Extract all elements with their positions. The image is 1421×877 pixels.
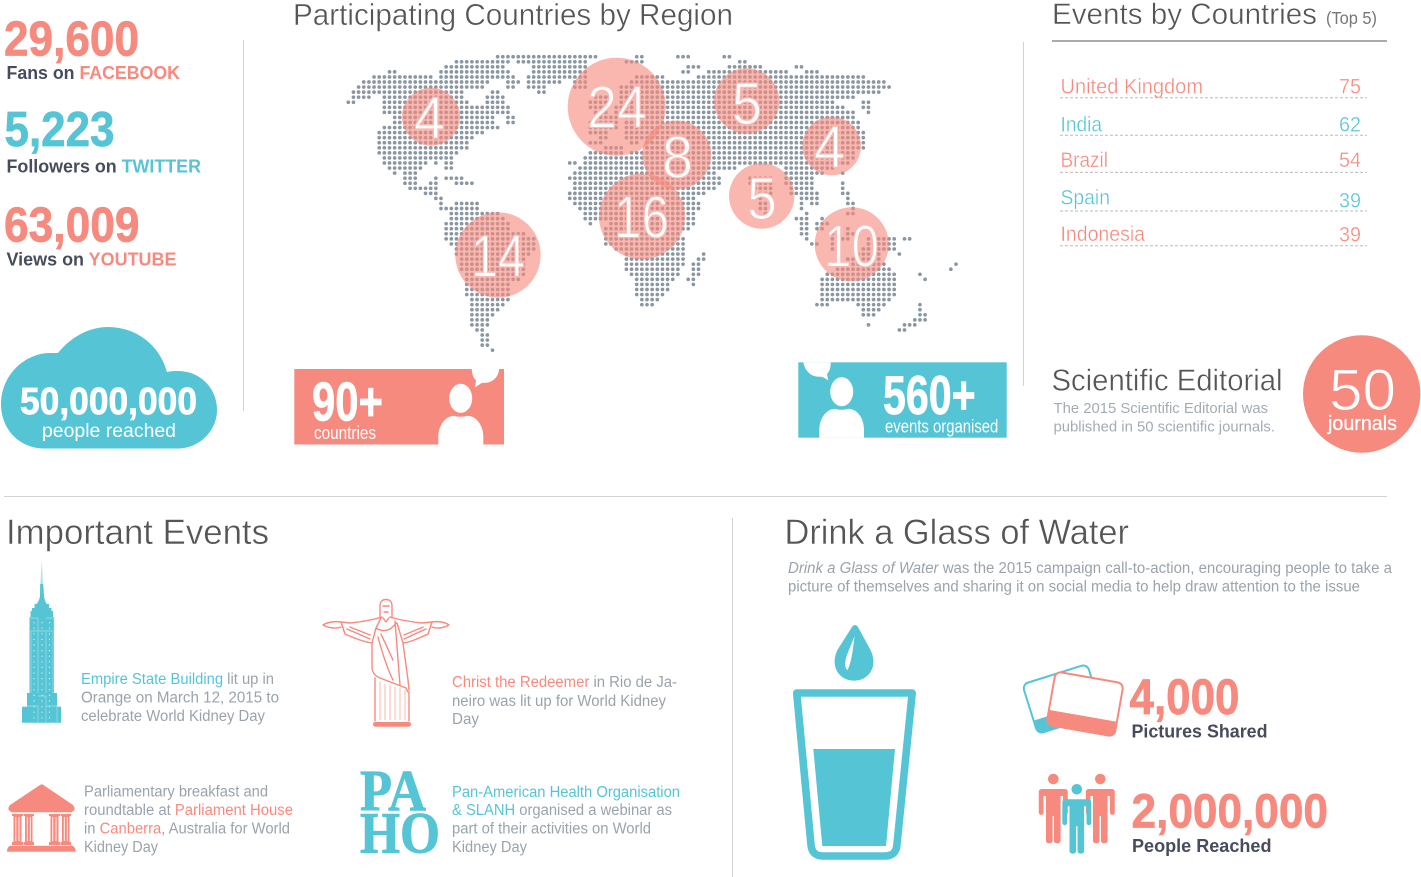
- heading: scientific editorial: Scientific Editorial: [1052, 363, 1282, 398]
- bubble: North America 4: [402, 86, 460, 152]
- icon: shared pictures: [1022, 664, 1124, 737]
- text: Empire State Building: Orange on March 12, 2015 to: [81, 689, 279, 706]
- stat: Twitter followers: 5,223: [4, 103, 114, 157]
- callout: 560+ events organised: events organised: [885, 417, 998, 437]
- row: United Kingdom: [1060, 75, 1367, 98]
- bubble: Africa 16: [599, 174, 685, 260]
- text: campaign description: Drink a Glass of Water was the 2015 campaign call-to-action, encouraging people to take a: [788, 560, 1392, 577]
- stat: YouTube views: Views on YOUTUBE: [6, 250, 176, 270]
- map bubbles: events per region: [402, 58, 889, 298]
- stat: Facebook fans: 29,600: [4, 12, 139, 66]
- text: Parliament House: Kidney Day: [84, 839, 158, 856]
- icon: water drop: [835, 625, 873, 681]
- text: Empire State Building: celebrate World Kidney Day: [81, 708, 265, 725]
- stat: YouTube views: [4, 199, 176, 270]
- icon: Empire State Building: [22, 560, 61, 723]
- callout: 560+ events organised: 560+: [883, 364, 976, 426]
- row: Brazil: [1060, 149, 1367, 172]
- icon: PAHO logo: HO: [360, 801, 440, 866]
- heading: important events: Important Events: [6, 513, 269, 552]
- text: Pan-American Health Organisation: Kidney Day: [452, 839, 527, 856]
- callout: 90+ countries: [294, 369, 504, 444]
- bubble: South America 14: [455, 212, 541, 298]
- heading: drink a glass of water: Drink a Glass of Water: [784, 513, 1129, 552]
- text: Parliament House: roundtable at Parliament House: [84, 802, 293, 819]
- row: Brazil: Brazil: [1060, 149, 1108, 172]
- icon: Christ the Redeemer: [323, 600, 449, 727]
- stat: pictures shared: Pictures Shared: [1132, 722, 1268, 742]
- bubble: East Asia 4: 4: [814, 114, 845, 180]
- text: Christ the Redeemer: [452, 674, 677, 728]
- text: editorial description: The 2015 Scientific Editorial was: [1054, 400, 1268, 417]
- badge: 50 journals: journals: [1327, 413, 1397, 435]
- stat: Facebook fans: Fans on FACEBOOK: [6, 63, 180, 83]
- stat: YouTube views: 63,009: [4, 199, 140, 253]
- badge: 50 journals: 50: [1329, 358, 1396, 423]
- sub-heading: top 5: (Top 5): [1326, 8, 1377, 28]
- row: Brazil: 54: [1339, 149, 1361, 172]
- dot world map: [348, 57, 956, 350]
- bubble: South Asia 5: [729, 163, 794, 232]
- row: India: 62: [1339, 114, 1361, 137]
- bubble: Russia 5: [714, 68, 779, 137]
- icon: PAHO logo: [360, 758, 440, 866]
- stat: Twitter followers: Followers on TWITTER: [6, 157, 201, 177]
- bubble: South America 14: 14: [471, 224, 525, 290]
- stat: people reached: People Reached: [1132, 836, 1272, 856]
- stat: pictures shared: 4,000: [1130, 669, 1240, 725]
- panel: events by countries: [1052, 0, 1387, 247]
- text: campaign description: [788, 560, 1392, 596]
- bubble: Middle East 8: 8: [662, 124, 693, 190]
- bubble: East Asia 4: [802, 114, 861, 180]
- cloud: people reached: 50,000,000: [20, 381, 197, 423]
- row: Spain: Spain: [1060, 186, 1110, 209]
- text: Pan-American Health Organisation: Pan-American Health Organisation: [452, 784, 680, 801]
- panel: social media stats: [1, 12, 217, 448]
- stat: pictures shared: [1130, 669, 1268, 742]
- bubble: Africa 16: 16: [614, 184, 669, 250]
- row: Indonesia: [1060, 223, 1367, 247]
- bubble: Russia 5: 5: [732, 71, 762, 137]
- row: Indonesia: 39: [1339, 224, 1361, 247]
- text: Parliament House: Parliamentary breakfast and: [84, 784, 268, 801]
- icon: people: [1039, 774, 1115, 854]
- row: India: India: [1060, 114, 1102, 137]
- panel: important events: [6, 513, 680, 866]
- text: Empire State Building: Empire State Building lit up in: [81, 671, 274, 688]
- icon: glass of water: [797, 693, 912, 856]
- text: Pan-American Health Organisation: part of their activities on World: [452, 820, 651, 838]
- row: United Kingdom: United Kingdom: [1060, 75, 1203, 98]
- stat: people reached: 2,000,000: [1132, 786, 1328, 839]
- text: Parliament House: in Canberra, Australia for World: [84, 821, 290, 838]
- text: Pan-American Health Organisation: & SLANH organised a webinar as: [452, 802, 672, 819]
- row: Spain: 39: [1339, 189, 1361, 212]
- text: Parliament House: [84, 784, 293, 856]
- text: Empire State Building: [81, 671, 279, 725]
- cloud: people reached: people reached: [42, 420, 176, 442]
- text: editorial description: [1054, 400, 1275, 436]
- icon: PAHO logo: PA: [360, 758, 426, 823]
- panel: drink a glass of water: [784, 513, 1392, 856]
- stat: Twitter followers: [4, 103, 201, 177]
- text: campaign description: picture of themselves and sharing it on social media to help draw attention to the issue: [788, 578, 1360, 596]
- bubble: Europe 24: [568, 58, 666, 156]
- callout: 560+ events organised: [798, 362, 1007, 438]
- text: editorial description: published in 50 scientific journals.: [1054, 419, 1275, 436]
- bubble: South Asia 5: 5: [747, 166, 777, 232]
- text: Christ the Redeemer: Christ the Redeemer in Rio de Ja-: [452, 674, 677, 691]
- text: Pan-American Health Organisation: [452, 784, 680, 856]
- bubble: North America 4: 4: [414, 86, 445, 152]
- row: India: [1060, 114, 1367, 137]
- cloud: people reached: [1, 327, 217, 448]
- text: Christ the Redeemer: neiro was lit up for World Kidney: [452, 693, 666, 710]
- icon: Parliament House: [7, 784, 76, 852]
- panel: scientific editorial: [1052, 335, 1420, 453]
- row: Indonesia: Indonesia: [1060, 223, 1145, 246]
- bubble: Europe 24: 24: [587, 74, 647, 140]
- bubble: South East Asia 10: 10: [824, 214, 879, 280]
- row: Spain: [1060, 186, 1367, 212]
- row: United Kingdom: 75: [1339, 75, 1361, 98]
- callout: 90+ countries: 90+: [312, 371, 383, 433]
- stat: Facebook fans: [4, 12, 180, 83]
- text: Christ the Redeemer: Day: [452, 711, 479, 728]
- callout: 90+ countries: countries: [314, 423, 376, 443]
- bubble: Middle East 8: [642, 120, 711, 190]
- badge: 50 journals: [1303, 335, 1420, 453]
